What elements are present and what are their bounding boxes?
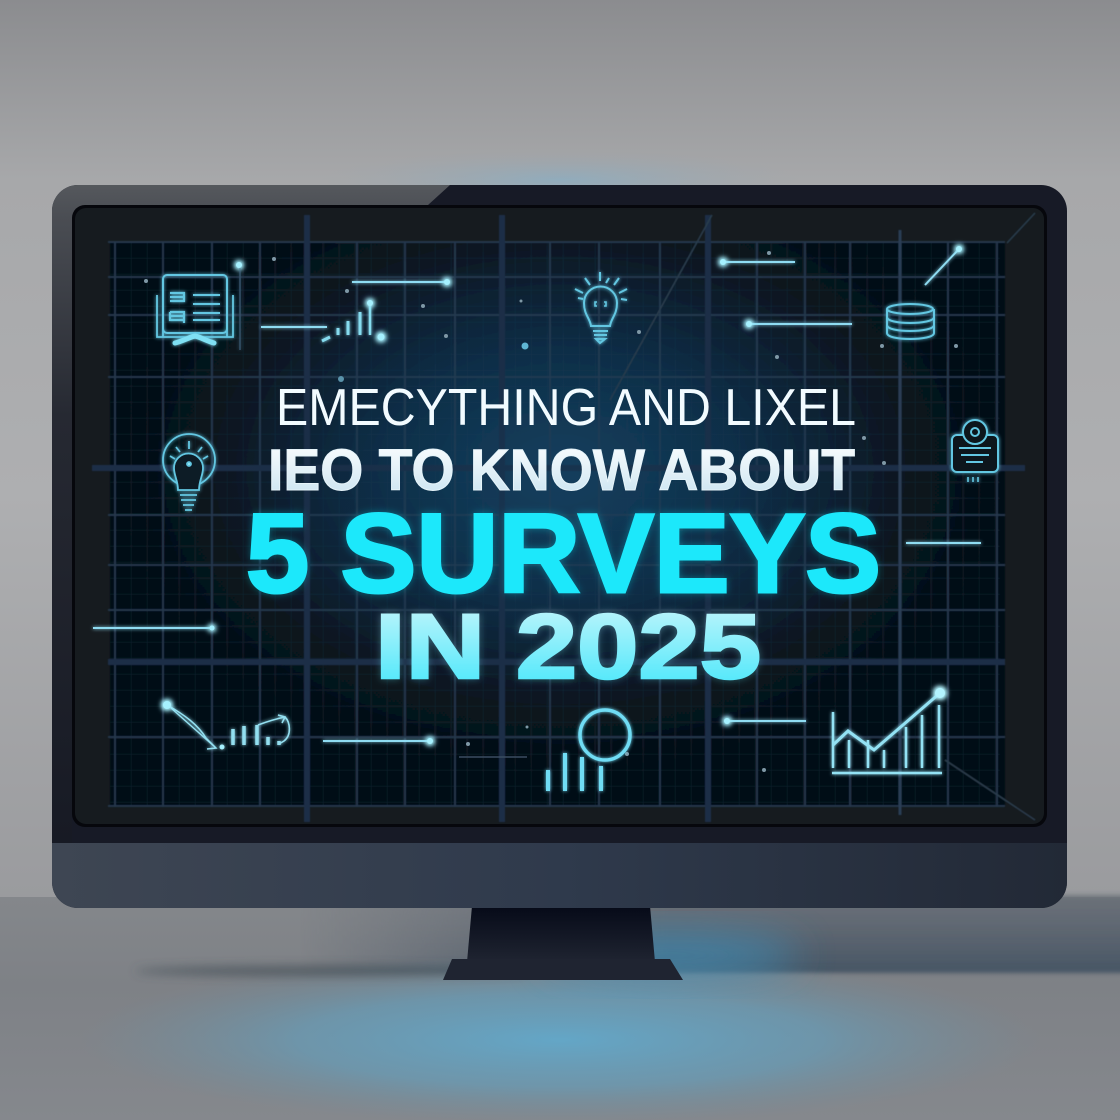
icon: light bulb left: [163, 434, 215, 510]
monitor body: [52, 185, 1067, 908]
line chart bottom right: [832, 688, 945, 773]
top glow behind monitor: [320, 150, 800, 210]
connector lines with nodes: [93, 246, 981, 744]
title line 4 year: IN 2025: [375, 596, 761, 698]
floor shadow: [135, 966, 525, 976]
title line 3 highlight: 5 SURVEYS: [246, 491, 881, 616]
title line 2: IEO TO KNOW ABOUT: [268, 438, 855, 503]
screen panel: [75, 208, 1044, 824]
icon: database stack: [887, 304, 934, 339]
scattered particles: [144, 251, 958, 772]
icon: document panel: [157, 275, 233, 343]
icon: trend curve with bars: [163, 701, 289, 750]
title line 1: EMECYTHING AND LIXEL: [276, 379, 856, 437]
icon: small bar chart: [322, 300, 384, 341]
icon: light bulb top: [575, 272, 627, 343]
icon: circle over bars: [548, 710, 630, 791]
title block: [246, 379, 881, 698]
icon: badge device: [952, 420, 998, 482]
floor: [0, 895, 1120, 1120]
screen grid: [92, 213, 1035, 822]
faint line: [459, 756, 527, 758]
monitor stand: [443, 906, 683, 980]
centre glow wash: [220, 310, 900, 690]
